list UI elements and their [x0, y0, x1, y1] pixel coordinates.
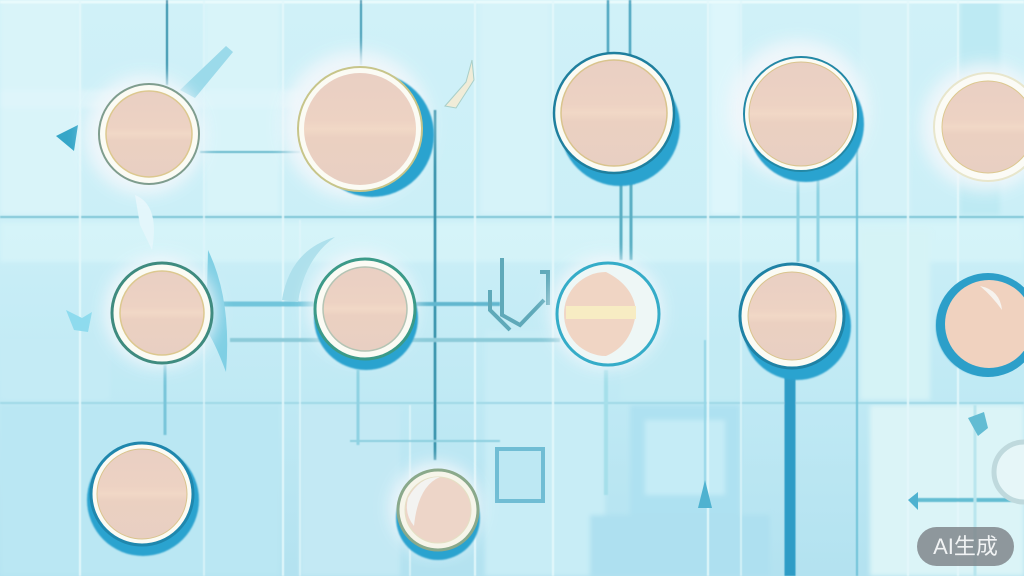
circle 2	[298, 67, 422, 191]
swoosh below first circle	[135, 195, 154, 250]
blue shadows	[87, 66, 1024, 560]
circle 6	[112, 263, 212, 363]
arc by second row	[282, 237, 335, 302]
circle 9	[740, 264, 844, 368]
circle 1	[99, 84, 199, 184]
swoosh left of second row	[206, 250, 227, 372]
small wing	[66, 310, 92, 332]
pale ring lower right	[994, 442, 1024, 502]
arrowhead left	[56, 125, 78, 151]
diagonal stroke upper left	[180, 46, 233, 98]
circle 12	[398, 470, 478, 550]
circle 10	[936, 273, 1024, 377]
AI generated badge	[917, 527, 1014, 566]
circle 4	[744, 57, 858, 171]
hook glyph	[490, 258, 548, 330]
small arrow	[698, 480, 712, 508]
small square	[497, 449, 543, 501]
diagonal stroke upper middle	[445, 60, 474, 108]
circle 11	[91, 443, 193, 545]
AI generated badge: AI生成	[933, 534, 998, 559]
circle 3	[554, 53, 674, 173]
small decorative glyphs	[56, 46, 1024, 510]
circle 5	[934, 73, 1024, 181]
circle 8	[557, 263, 659, 365]
small lower-right arrow	[908, 492, 918, 510]
circle 7	[315, 259, 415, 359]
